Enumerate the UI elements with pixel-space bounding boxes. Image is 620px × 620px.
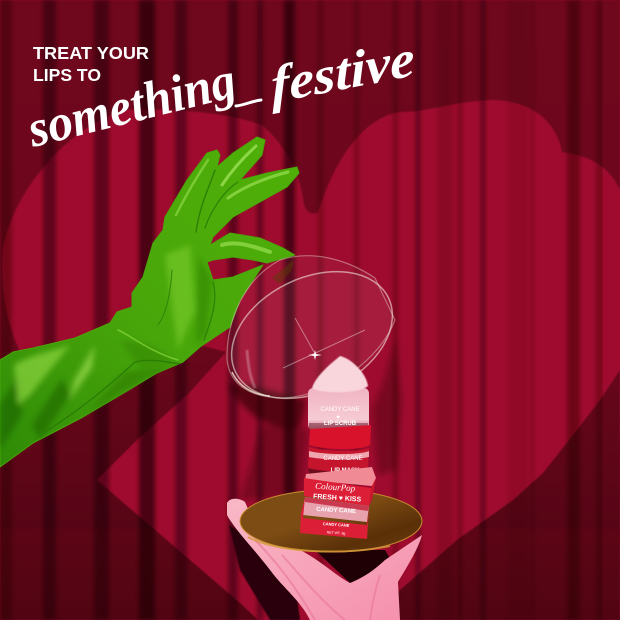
green gloved arm [0,137,299,467]
glove shading and highlights [0,146,288,450]
lip mask jar [308,425,371,477]
heading: treat your lips to: TREAT YOUR [33,43,149,63]
heading: treat your lips to [33,43,149,85]
lip scrub jar: CANDY CANE [320,407,360,413]
rim [211,247,413,423]
box: ColourPop [315,481,356,493]
tint over fingers [272,260,293,284]
plate shadow on curtain [315,550,400,590]
dome body [227,256,395,398]
finger gap shadow [229,525,300,620]
lip scrub jar: ♥ [336,415,340,421]
box: CANDY CANE [316,507,356,515]
heading: something festive script: something [21,52,242,159]
box [300,467,376,539]
reflections [247,350,255,388]
heading: something festive script: festive [270,29,416,115]
lip scrub jar [308,356,369,430]
pink gloved hand [227,499,422,620]
lip scrub jar: LIP SCRUB [324,421,357,427]
gold plate [240,490,422,552]
glove fingers [227,499,422,620]
heading: something festive script [21,29,416,159]
product stack [300,356,376,539]
heading: treat your lips to: LIPS TO [33,65,101,85]
lip mask jar: LIP MASK [331,468,360,474]
sparkle [308,350,322,360]
glass dome [211,247,413,423]
box: NET WT. 8g [327,530,346,536]
box: FRESH ♥ KISS [313,493,362,504]
lip mask jar: CANDY CANE [323,456,363,462]
box: CANDY CANE [323,521,350,528]
arm and hand silhouette [0,137,299,467]
shadow: dome and hand on curtain [228,340,402,500]
